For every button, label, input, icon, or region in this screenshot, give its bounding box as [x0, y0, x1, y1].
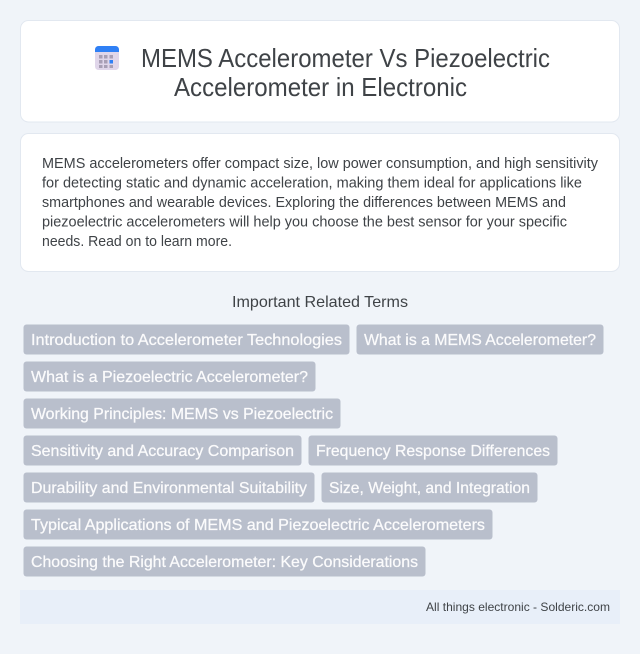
intro text: needs. Read on to learn more.	[42, 234, 232, 250]
tag: Sensitivity and Accuracy Comparison	[31, 443, 294, 460]
panel: introduction	[20, 134, 620, 272]
heading: important related terms: Important Related Terms	[232, 294, 408, 311]
intro text: smartphones and wearable devices. Exploring the differences between MEMS and	[42, 195, 566, 211]
tag	[308, 436, 558, 466]
intro text: piezoelectric accelerometers will help you choose the best sensor for your specific	[42, 214, 567, 230]
title: MEMS Accelerometer Vs Piezoelectric	[141, 45, 550, 73]
title: Accelerometer in Electronic	[174, 74, 467, 102]
tag: Size, Weight, and Integration	[329, 480, 530, 497]
title	[141, 45, 550, 102]
icon: calendar	[95, 46, 119, 70]
footer: All things electronic - Solderic.com	[426, 600, 610, 614]
tag	[356, 324, 604, 354]
tag	[24, 546, 426, 576]
tag: What is a Piezoelectric Accelerometer?	[31, 369, 308, 386]
tag	[24, 472, 314, 502]
tag: Frequency Response Differences	[316, 443, 550, 460]
tag	[24, 510, 492, 540]
footer	[20, 590, 620, 624]
tag: Typical Applications of MEMS and Piezoelectric Accelerometers	[31, 517, 485, 534]
tag: Working Principles: MEMS vs Piezoelectric	[31, 406, 333, 423]
panel: title card	[20, 20, 620, 122]
tag: Choosing the Right Accelerometer: Key Considerations	[31, 554, 418, 571]
intro text	[42, 156, 599, 250]
tag: Durability and Environmental Suitability	[31, 480, 307, 497]
intro text: for detecting static and dynamic acceleration, making them ideal for applications like	[42, 176, 582, 192]
panel: related terms tags	[24, 324, 604, 576]
tag	[24, 362, 316, 392]
tag	[24, 398, 340, 428]
tag	[322, 472, 538, 502]
tag: Introduction to Accelerometer Technologies	[31, 332, 342, 349]
intro text: MEMS accelerometers offer compact size, low power consumption, and high sensitivity	[42, 156, 599, 172]
tag	[24, 436, 302, 466]
tag	[24, 324, 350, 354]
tag: What is a MEMS Accelerometer?	[364, 332, 596, 349]
